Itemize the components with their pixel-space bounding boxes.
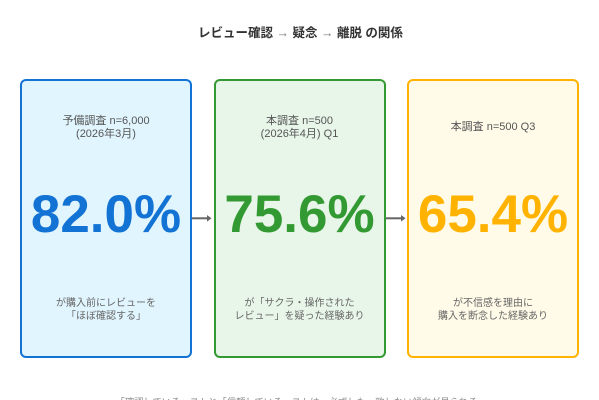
value: 75.6%: 75.6%	[224, 185, 375, 244]
caption: abandonment: 購入を断念した経験あり	[438, 310, 548, 322]
label: preliminary survey sample	[62, 114, 150, 140]
label: main survey Q1 sample: 本調査 n=500	[266, 115, 333, 127]
label: main survey Q1 sample: (2026年4月) Q1	[261, 128, 338, 140]
label: preliminary survey sample: (2026年3月)	[76, 128, 136, 140]
caption: review check: が購入前にレビューを	[56, 298, 156, 308]
arrow: first to second	[192, 215, 212, 222]
panel: preliminary survey	[20, 79, 192, 358]
value: 65.4%: 65.4%	[418, 185, 568, 244]
label: preliminary survey sample: 予備調査 n=6,000	[62, 115, 150, 127]
label: main survey Q3 sample: 本調査 n=500 Q3	[451, 121, 535, 133]
caption: suspicion	[234, 297, 364, 322]
title: レビュー確認 → 疑念 → 離脱 の関係	[198, 26, 403, 40]
label: main survey Q1 sample	[261, 114, 338, 140]
caption: abandonment: が不信感を理由に	[453, 298, 533, 308]
caption: review check: 「ほぼ確認する」	[66, 310, 146, 322]
caption: suspicion: が「サクラ・操作された	[244, 298, 354, 308]
panel: main survey Q1	[214, 79, 386, 358]
value: 82.0%: 82.0%	[31, 185, 181, 244]
caption: review check	[56, 297, 156, 322]
panel: main survey Q3	[407, 79, 579, 358]
arrow: second to third	[386, 215, 406, 222]
caption: suspicion: レビュー」を疑った経験あり	[234, 310, 364, 322]
caption: abandonment	[438, 297, 548, 322]
